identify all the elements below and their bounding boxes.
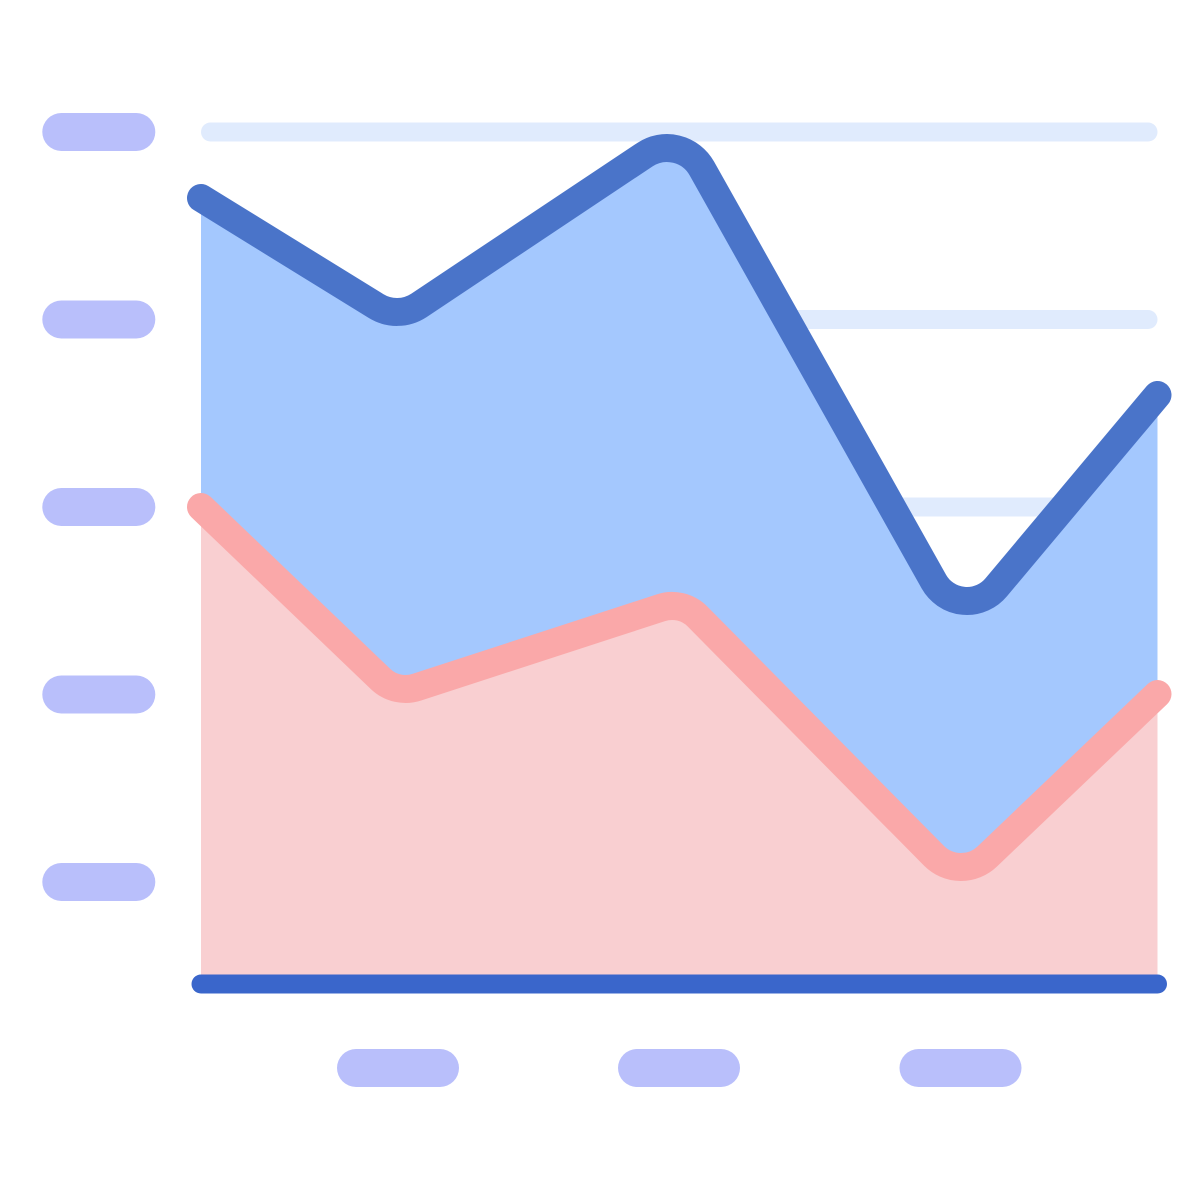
y axis labels [42, 113, 155, 901]
pink line [201, 507, 1158, 867]
grid lines [210, 132, 1148, 507]
x axis labels [337, 1049, 1022, 1087]
pink area [201, 507, 1158, 984]
blue area [201, 148, 1158, 984]
blue line [201, 148, 1158, 601]
x axis [201, 974, 1158, 994]
